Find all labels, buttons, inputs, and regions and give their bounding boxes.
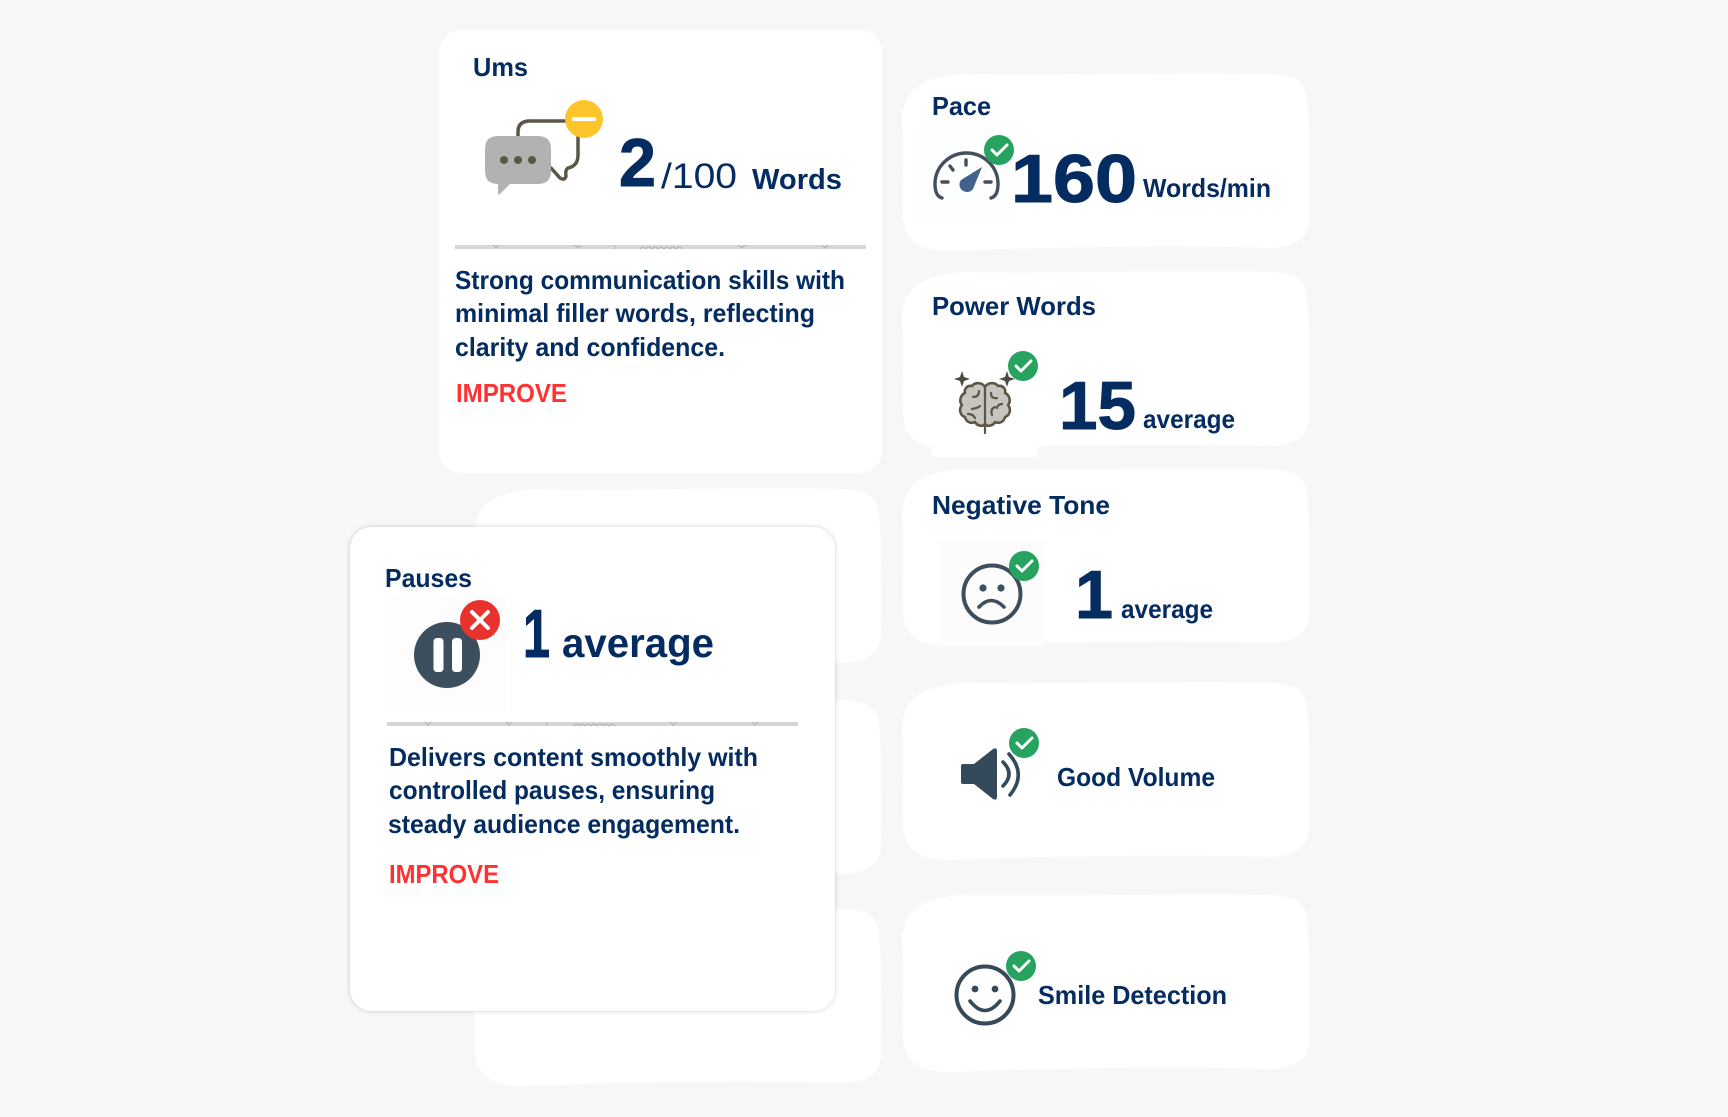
panel: power words (902, 271, 1310, 457)
ums description (455, 265, 845, 362)
power words heading: Power Words (932, 291, 1096, 321)
panel: smile detection (902, 894, 1310, 1072)
ums description: minimal filler words, reflecting (455, 298, 815, 328)
smile detection label: Smile Detection (1038, 980, 1227, 1010)
icon: speaker with check (961, 728, 1039, 800)
power words card background (902, 271, 1310, 449)
panel: pauses (350, 527, 835, 1011)
pauses heading: Pauses (385, 563, 472, 593)
power words unit: average (1143, 404, 1235, 434)
icon: speech bubbles with yellow minus (485, 100, 603, 195)
negative tone unit: average (1121, 594, 1213, 624)
ums unit: Words (752, 164, 842, 196)
smile detection card background (902, 894, 1310, 1072)
ums value: 2 (619, 125, 656, 201)
pace card background (902, 73, 1310, 251)
panel: good volume (902, 682, 1310, 860)
pauses card background (350, 527, 835, 1011)
ums card background (439, 30, 882, 473)
pauses improve link: IMPROVE (389, 859, 499, 889)
ums description: Strong communication skills with (455, 265, 845, 295)
negative tone value: 1 (1075, 557, 1113, 633)
pauses value: 1 (523, 596, 550, 672)
pauses unit: average (562, 620, 714, 666)
icon: pause button with red cross (414, 600, 500, 688)
pauses description (388, 742, 758, 839)
negative tone heading: Negative Tone (932, 490, 1110, 520)
negative tone card background (902, 468, 1310, 646)
ums improve link: IMPROVE (456, 378, 567, 408)
panel: background card behind pauses, bottom (474, 908, 882, 1086)
power words value: 15 (1059, 368, 1136, 444)
pace unit: Words/min (1143, 173, 1271, 203)
icon: brain with sparkles and check (954, 351, 1038, 433)
panel: negative tone (902, 468, 1310, 647)
ums description: clarity and confidence. (455, 332, 725, 362)
icon: speedometer with check (935, 135, 1014, 198)
ums heading: Ums (473, 52, 528, 82)
pauses description: steady audience engagement. (388, 809, 740, 839)
panel: pace (902, 73, 1310, 251)
pace heading: Pace (932, 91, 991, 121)
pauses description: Delivers content smoothly with (389, 742, 758, 772)
panel: ums (439, 30, 882, 473)
pauses description: controlled pauses, ensuring (389, 775, 715, 805)
icon: smiling face with check (956, 951, 1036, 1024)
good volume card background (902, 682, 1310, 860)
pace value: 160 (1011, 141, 1137, 217)
panel: background card behind pauses, top (474, 488, 882, 666)
panel: background card behind pauses, middle (474, 699, 882, 877)
good volume label: Good Volume (1057, 762, 1215, 792)
ums scale: /100 (661, 157, 737, 196)
icon: sad face with check (964, 551, 1039, 622)
